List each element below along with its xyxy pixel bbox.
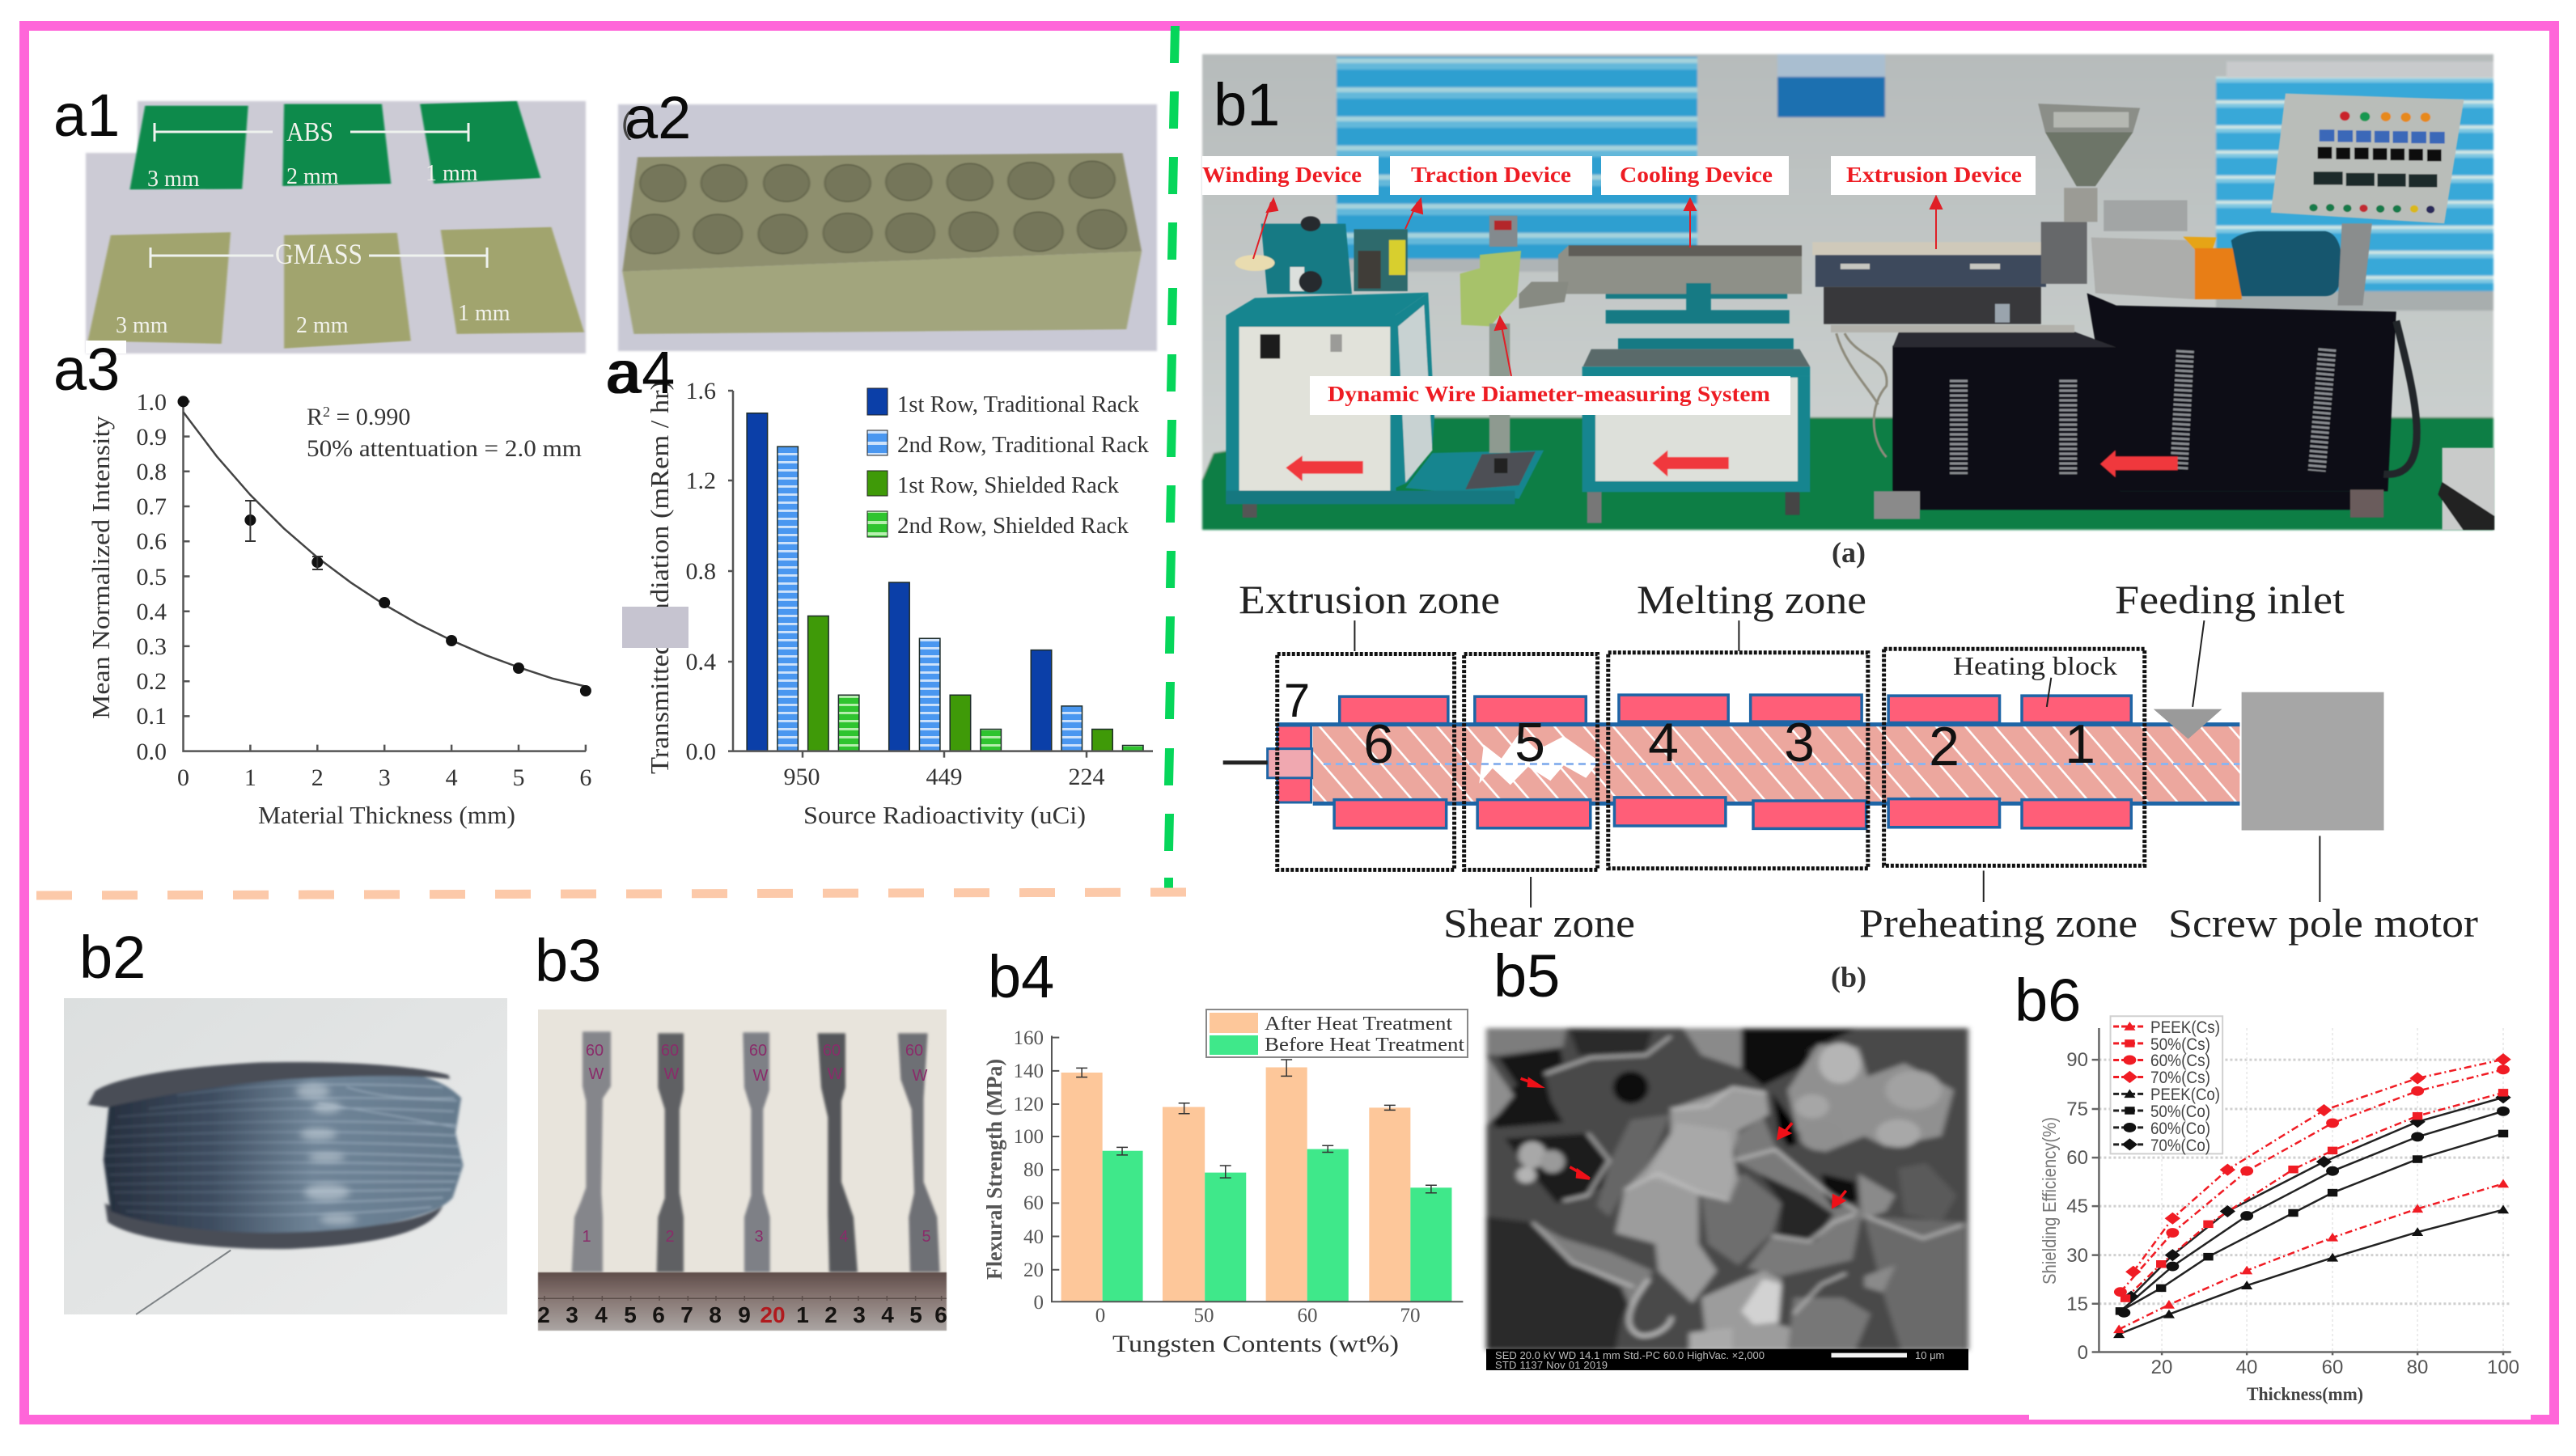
- zone numbers: 7: [1284, 675, 1310, 727]
- panel: b5 SEM micrograph: [1486, 1028, 1968, 1371]
- room background: [1202, 54, 2493, 530]
- winding and traction unit: [1261, 224, 1352, 294]
- y tick labels: 0.6: [136, 528, 167, 555]
- y tick labels: 0: [1034, 1292, 1044, 1314]
- top flange: [88, 1062, 450, 1107]
- heating blocks: [1334, 695, 2131, 828]
- leader lines: [1354, 620, 2320, 908]
- y tick labels: 90: [2066, 1049, 2088, 1071]
- extruder: [1812, 93, 2494, 530]
- axis titles: Flexural Strength (MPa): [982, 1059, 1006, 1280]
- fit annotation: [307, 404, 582, 462]
- zone labels: Extrusion zone: [1239, 577, 1500, 622]
- plate labels: 2 mm: [286, 164, 339, 189]
- photo background: [538, 1009, 947, 1331]
- y tick labels: 60: [1023, 1192, 1044, 1214]
- specimen markings: 5: [922, 1228, 931, 1246]
- y tick labels: 0.8: [136, 459, 167, 485]
- label a2: (: [621, 107, 632, 141]
- instrument text: 10 μm: [1915, 1349, 1944, 1361]
- panel: a4 transmitted radiation bar chart: [622, 378, 1153, 829]
- label b1: b1: [1214, 71, 1280, 138]
- bright ridges: [1532, 1036, 1963, 1335]
- ruler numbers: 4: [881, 1302, 894, 1327]
- ruler numbers: 2: [824, 1302, 837, 1327]
- caption (b): (b): [1831, 961, 1866, 993]
- instrument text: [1495, 1349, 1944, 1371]
- plate labels: 1 mm: [458, 301, 511, 326]
- y tick labels: 1.6: [686, 378, 716, 404]
- zone labels: Preheating zone: [1859, 900, 2137, 946]
- x tick labels: 2: [311, 764, 324, 791]
- ruler numbers: 5: [624, 1302, 637, 1327]
- y tick labels: 30: [2066, 1245, 2088, 1267]
- ruler numbers: 3: [566, 1302, 578, 1327]
- x tick labels: 449: [926, 764, 963, 790]
- gearbox, guard and motor: [2091, 237, 2196, 299]
- specimen markings: 60: [749, 1042, 767, 1060]
- poster: [1777, 54, 1885, 104]
- fitted curve: [183, 412, 586, 687]
- device labels: Cooling Device: [1620, 163, 1773, 187]
- ruler body: [538, 1272, 947, 1331]
- zone numbers: 3: [1784, 712, 1815, 773]
- instrument text: STD 1137 Nov 01 2019: [1495, 1359, 1608, 1371]
- bottom flange: [105, 1203, 443, 1249]
- legend labels: PEEK(Cs): [2150, 1018, 2220, 1037]
- ruler numbers: 6: [652, 1302, 665, 1327]
- x tick labels: 3: [379, 764, 391, 791]
- y tick labels: 0.0: [136, 739, 167, 765]
- fit annotation: 2: [323, 404, 330, 420]
- photo background: [618, 104, 1157, 351]
- gridlines: [2099, 1060, 2511, 1304]
- fit annotation: R: [307, 404, 323, 430]
- barrel with screw hatching: [1313, 726, 2239, 802]
- y tick labels: 0: [2078, 1342, 2088, 1364]
- dimension lines: [150, 123, 487, 268]
- y tick labels: 1.2: [686, 468, 716, 494]
- ruler numbers: 2: [537, 1302, 550, 1327]
- zone labels: Melting zone: [1637, 577, 1866, 622]
- cobalt markers: [2113, 1091, 2511, 1338]
- y tick labels: 1.0: [136, 389, 167, 416]
- legend labels: 50%(Cs): [2150, 1035, 2210, 1054]
- specimen markings: 60: [823, 1042, 841, 1060]
- y tick labels: 0.1: [136, 703, 167, 730]
- feeding hopper: [2154, 709, 2222, 739]
- axes: [1052, 1035, 1463, 1302]
- scale bar strip: [1486, 1349, 1968, 1370]
- y tick labels: 0.4: [686, 649, 716, 675]
- zone numbers: 2: [1929, 716, 1960, 777]
- barrel walls: [1277, 725, 2239, 803]
- ruler numbers: 5: [909, 1302, 922, 1327]
- legend labels: 70%(Cs): [2150, 1069, 2210, 1087]
- y tick labels: 140: [1013, 1060, 1044, 1082]
- data points: [178, 396, 591, 696]
- ruler numbers: 8: [709, 1302, 722, 1327]
- label b4: b4: [988, 943, 1054, 1010]
- label a4: a4: [608, 339, 675, 406]
- ruler numbers: 9: [738, 1302, 751, 1327]
- barrel: [1812, 242, 2043, 255]
- device labels: Dynamic Wire Diameter-measuring System: [1328, 382, 1771, 406]
- x axis title: Source Radioactivity (uCi): [803, 801, 1086, 829]
- axes: [183, 401, 586, 751]
- specimen markings: 60: [661, 1042, 679, 1060]
- hoses under barrel: [1837, 333, 1887, 457]
- legend labels: 50%(Co): [2150, 1103, 2210, 1121]
- x tick labels: [783, 764, 1105, 790]
- legend labels: PEEK(Co): [2150, 1086, 2220, 1104]
- legend labels: 60%(Cs): [2150, 1052, 2210, 1070]
- caesium markers: [2113, 1053, 2511, 1333]
- ruler numbers: 4: [595, 1302, 608, 1327]
- photo background: [64, 998, 507, 1314]
- zone numbers: 6: [1363, 713, 1394, 775]
- x tick labels: 0: [1095, 1305, 1105, 1327]
- zone numbers: 5: [1515, 712, 1545, 773]
- specimen markings: 60: [905, 1042, 923, 1060]
- x tick labels: 50: [1194, 1305, 1214, 1327]
- left machines: [1226, 216, 1810, 523]
- panel: b4 flexural strength bar chart: Tungsten Contents (wt%): [1112, 1331, 1399, 1357]
- panel labels: [53, 71, 2081, 1034]
- thin red pointer arrows: [1253, 197, 1942, 376]
- device label boxes: [1202, 156, 2036, 415]
- ruler numbers: 20: [760, 1302, 786, 1327]
- y tick labels: 0.4: [136, 599, 167, 625]
- specimen markings: [582, 1042, 931, 1246]
- plate labels: GMASS: [275, 238, 362, 270]
- specimen markings: W: [664, 1065, 680, 1083]
- label a4: a: [605, 339, 639, 406]
- x tick labels: 20: [2151, 1357, 2172, 1378]
- legend labels: 60%(Co): [2150, 1120, 2210, 1138]
- legend labels: 70%(Co): [2150, 1136, 2210, 1155]
- side device: [2443, 448, 2494, 530]
- axis titles: Material Thickness (mm): [258, 801, 515, 829]
- after heat treatment bars: [1061, 1068, 1410, 1302]
- x tick labels: 1: [244, 764, 256, 791]
- label a2: a2: [625, 84, 691, 151]
- photo background: [86, 101, 586, 353]
- panel: b6 shielding efficiency chart: [2029, 1016, 2531, 1420]
- label b5: b5: [1493, 942, 1560, 1009]
- y tick labels: [1013, 1027, 1044, 1314]
- ruler numbers: 1: [796, 1302, 809, 1327]
- caption (a): (a): [1832, 536, 1866, 569]
- specimen markings: W: [913, 1067, 928, 1085]
- axis titles: Thickness(mm): [2247, 1384, 2363, 1404]
- legend: Before Heat Treatment: [1265, 1035, 1464, 1056]
- legend: After Heat Treatment: [1265, 1014, 1452, 1035]
- loose wire: [136, 1251, 231, 1314]
- label a3: a3: [53, 336, 120, 403]
- device labels: Traction Device: [1411, 163, 1571, 187]
- error bars: [245, 501, 323, 569]
- y tick labels: 0.8: [686, 558, 716, 585]
- y tick labels: [686, 378, 716, 765]
- flow arrow: [2100, 451, 2178, 477]
- ruler numbers: 3: [853, 1302, 866, 1327]
- grey cover patch: [622, 607, 688, 648]
- legend labels: [2150, 1018, 2220, 1155]
- y tick labels: 15: [2066, 1293, 2088, 1315]
- ABS green plates: [129, 101, 540, 189]
- die: [1277, 726, 1311, 802]
- zone labels: Screw pole motor: [2168, 900, 2478, 946]
- specimen markings: W: [589, 1065, 604, 1083]
- x tick labels: 6: [579, 764, 591, 791]
- x tick labels: 40: [2236, 1357, 2257, 1378]
- wound filament: [104, 1071, 463, 1233]
- y tick labels: 0.0: [686, 739, 716, 765]
- panel: a2 shielded rack photo: [618, 104, 1157, 351]
- plate labels: ABS: [286, 117, 333, 147]
- y tick labels: 120: [1013, 1094, 1044, 1115]
- plate labels: 2 mm: [296, 313, 349, 338]
- instrument text: SED 20.0 kV WD 14.1 mm Std.-PC 60.0 HighVac. ×2,000: [1495, 1349, 1765, 1361]
- x tick labels: 70: [1400, 1305, 1421, 1327]
- y tick labels: 20: [1023, 1259, 1044, 1281]
- x tick labels: 950: [783, 764, 820, 790]
- x tick labels: 80: [2407, 1357, 2428, 1378]
- device labels: Extrusion Device: [1846, 163, 2022, 187]
- zone numbers: 1: [2065, 713, 2095, 775]
- plate labels: 3 mm: [147, 167, 200, 192]
- bars: [747, 413, 1143, 751]
- y tick labels: 45: [2066, 1196, 2088, 1217]
- orange dashed divider: [36, 892, 1186, 895]
- filament strands: [105, 1085, 461, 1215]
- error bars: [1076, 1060, 1437, 1193]
- y tick labels: 0.2: [136, 668, 167, 695]
- axes: [728, 391, 1153, 758]
- legend: 2nd Row, Traditional Rack: [897, 432, 1149, 458]
- panel: b2 filament spool photo: [64, 998, 507, 1314]
- y tick labels: 60: [2066, 1147, 2088, 1169]
- specimen markings: W: [828, 1065, 843, 1083]
- panel: b3 tensile specimens photo: [537, 1009, 947, 1331]
- x tick labels: 100: [2487, 1357, 2519, 1378]
- x tick labels: [1095, 1305, 1421, 1327]
- x tick labels: 60: [1298, 1305, 1317, 1327]
- label b6: b6: [2015, 967, 2081, 1034]
- zone boxes: [1277, 649, 2145, 870]
- specimen markings: W: [753, 1067, 769, 1085]
- device labels: Winding Device: [1202, 163, 1362, 187]
- panel: b1 extrusion line photo: [1202, 54, 2494, 530]
- legend: 2nd Row, Shielded Rack: [897, 513, 1129, 539]
- ruler numbers: 7: [680, 1302, 693, 1327]
- plate labels: [116, 117, 511, 338]
- label a1: a1: [53, 82, 120, 149]
- zone labels: [1239, 577, 2478, 946]
- SEM surface texture: [1486, 1028, 1968, 1350]
- panel: a3 attenuation chart: [86, 341, 591, 829]
- shear zone gap: [1479, 734, 1599, 785]
- y tick labels: [2066, 1049, 2088, 1364]
- y tick labels: 0.5: [136, 564, 167, 590]
- panel: extruder barrel schematic: [1223, 577, 2478, 946]
- cooling tank: [1558, 245, 1802, 294]
- red pointers: [1521, 1078, 1846, 1207]
- hopper: [2038, 104, 2140, 132]
- panel: b6 shielding efficiency chart: Shielding Efficiency(%): [2039, 1117, 2060, 1285]
- dogbone specimens: [572, 1031, 940, 1272]
- panel: a1 ABS and GMASS sample photo: [86, 101, 586, 353]
- specimen markings: 2: [665, 1228, 675, 1246]
- screw motor: [2242, 692, 2384, 830]
- GMASS olive plates: [88, 227, 584, 349]
- panel: a3 attenuation chart: Mean Normalized Intensity: [87, 415, 115, 719]
- label b2: b2: [79, 924, 146, 991]
- flow arrows: [1286, 455, 1363, 481]
- y tick labels: 40: [1023, 1226, 1044, 1248]
- legend box and keys: [2111, 1016, 2222, 1153]
- specimen markings: 4: [839, 1228, 849, 1246]
- x tick labels: 4: [446, 764, 458, 791]
- legend: 1st Row, Shielded Rack: [897, 472, 1119, 498]
- legend: [867, 388, 1149, 539]
- caesium curves: [2119, 1060, 2503, 1329]
- zone numbers: 4: [1648, 712, 1679, 773]
- plate labels: 1 mm: [426, 161, 478, 186]
- y tick labels: 0.9: [136, 424, 167, 451]
- y tick labels: [136, 389, 167, 765]
- panel: b4 flexural strength bar chart: [982, 1009, 1468, 1357]
- diameter measuring system: [1489, 216, 1518, 247]
- axes: [2092, 1028, 2511, 1355]
- ruler ticks: [538, 1296, 947, 1301]
- y tick labels: 100: [1013, 1126, 1044, 1148]
- label b3: b3: [535, 927, 601, 994]
- ruler numbers: [537, 1302, 947, 1327]
- green dashed divider: [1164, 26, 1180, 890]
- zone labels: Feeding inlet: [2115, 577, 2345, 622]
- specimen markings: 3: [754, 1228, 764, 1246]
- specimen markings: 1: [582, 1228, 591, 1246]
- plate labels: 3 mm: [116, 313, 168, 338]
- fit annotation: = 0.990: [330, 404, 410, 430]
- ruler numbers: 6: [934, 1302, 947, 1327]
- highlight band: [296, 1084, 357, 1225]
- cobalt curves: [2119, 1098, 2503, 1334]
- block: [622, 153, 1142, 334]
- x tick labels: 224: [1068, 764, 1105, 790]
- y tick labels: 75: [2066, 1098, 2088, 1120]
- x tick labels: [2151, 1357, 2519, 1378]
- legend: 1st Row, Traditional Rack: [897, 392, 1139, 417]
- white backing: [2029, 1367, 2531, 1420]
- device labels: [1202, 163, 2022, 406]
- specimen markings: 60: [586, 1042, 604, 1060]
- fit annotation: 50% attentuation = 2.0 mm: [307, 435, 582, 462]
- y tick labels: 0.7: [136, 493, 167, 520]
- black cabinets: [2087, 293, 2396, 491]
- legend: [1206, 1009, 1468, 1057]
- x tick labels: 5: [513, 764, 524, 791]
- before heat treatment bars: [1103, 1149, 1451, 1302]
- y tick labels: 80: [1023, 1159, 1044, 1181]
- zone labels: Heating block: [1953, 651, 2117, 680]
- control panel: [2337, 223, 2372, 306]
- y tick labels: 0.3: [136, 633, 167, 660]
- zone numbers: [1284, 675, 2095, 777]
- x tick labels: [177, 764, 591, 791]
- zone labels: Shear zone: [1443, 900, 1635, 946]
- y axis title: Transmitted Radiation (mRem / hr): [645, 381, 674, 774]
- y tick labels: 160: [1013, 1027, 1044, 1049]
- white patch behind label: [86, 341, 126, 353]
- x tick labels: 0: [177, 764, 189, 791]
- x tick labels: 60: [2322, 1357, 2343, 1378]
